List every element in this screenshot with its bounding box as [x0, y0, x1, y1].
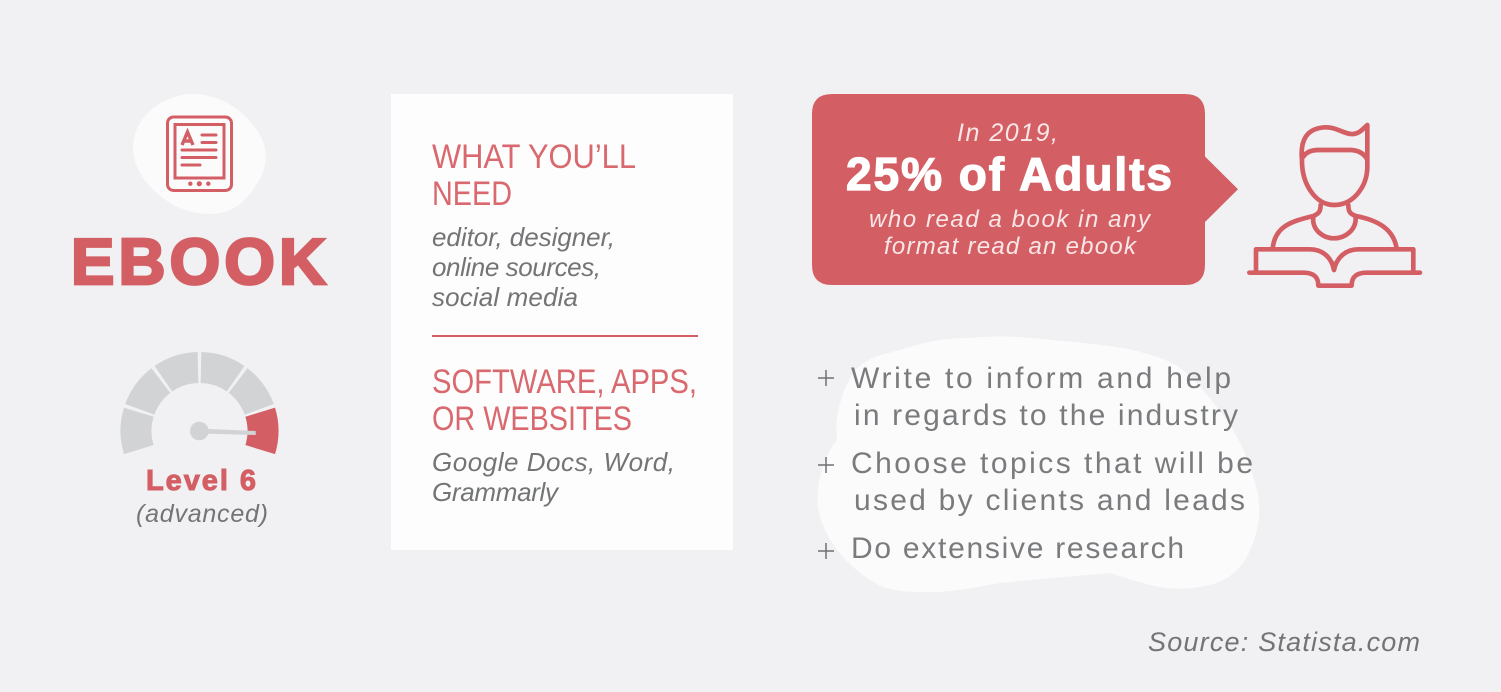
tip 1: Write to inform and help — [851, 362, 1231, 395]
text: people and sources — [432, 222, 615, 312]
callout: statistic: In 2019, — [957, 119, 1058, 147]
tip 1: in regards to the industry — [854, 399, 1238, 432]
heading: what you'll need: WHAT YOU’LL — [432, 138, 636, 176]
text: tools: Google Docs, Word, — [432, 447, 675, 477]
icon: ebook reader on white blob — [133, 94, 266, 214]
tip 1 — [818, 362, 1238, 432]
source: Source: Statista.com — [1148, 627, 1420, 657]
tip 2: used by clients and leads — [854, 484, 1245, 517]
blob behind tips — [817, 336, 1259, 592]
heading: what you'll need: NEED — [432, 175, 512, 213]
panel: requirements — [391, 94, 733, 550]
heading: software: SOFTWARE, APPS, — [432, 363, 697, 401]
gauge label — [136, 465, 268, 528]
text: tools — [432, 447, 675, 507]
tip 3: Do extensive research — [851, 532, 1184, 565]
callout: statistic: format read an ebook — [884, 233, 1138, 260]
callout: statistic: who read a book in any — [869, 206, 1152, 233]
callout: statistic: 25% of Adults — [846, 148, 1172, 200]
tip 2: Choose topics that will be — [851, 447, 1253, 480]
heading: what you'll need — [432, 138, 636, 213]
icon: person reading a book — [1249, 125, 1420, 286]
gauge label: Level 6 — [146, 465, 256, 497]
text: people and sources: editor, designer, — [432, 222, 615, 252]
title: EBOOK — [71, 225, 326, 298]
text: people and sources: social media — [432, 282, 578, 312]
callout: statistic — [812, 94, 1238, 285]
text: tools: Grammarly — [432, 477, 560, 507]
list of tips — [818, 362, 1253, 565]
gauge chart: level 6 of 6 — [136, 368, 263, 450]
text: people and sources: online sources, — [432, 252, 601, 282]
heading: software — [432, 363, 697, 438]
tip 2 — [818, 447, 1253, 517]
heading: software: OR WEBSITES — [432, 400, 632, 438]
gauge label: (advanced) — [136, 500, 268, 528]
